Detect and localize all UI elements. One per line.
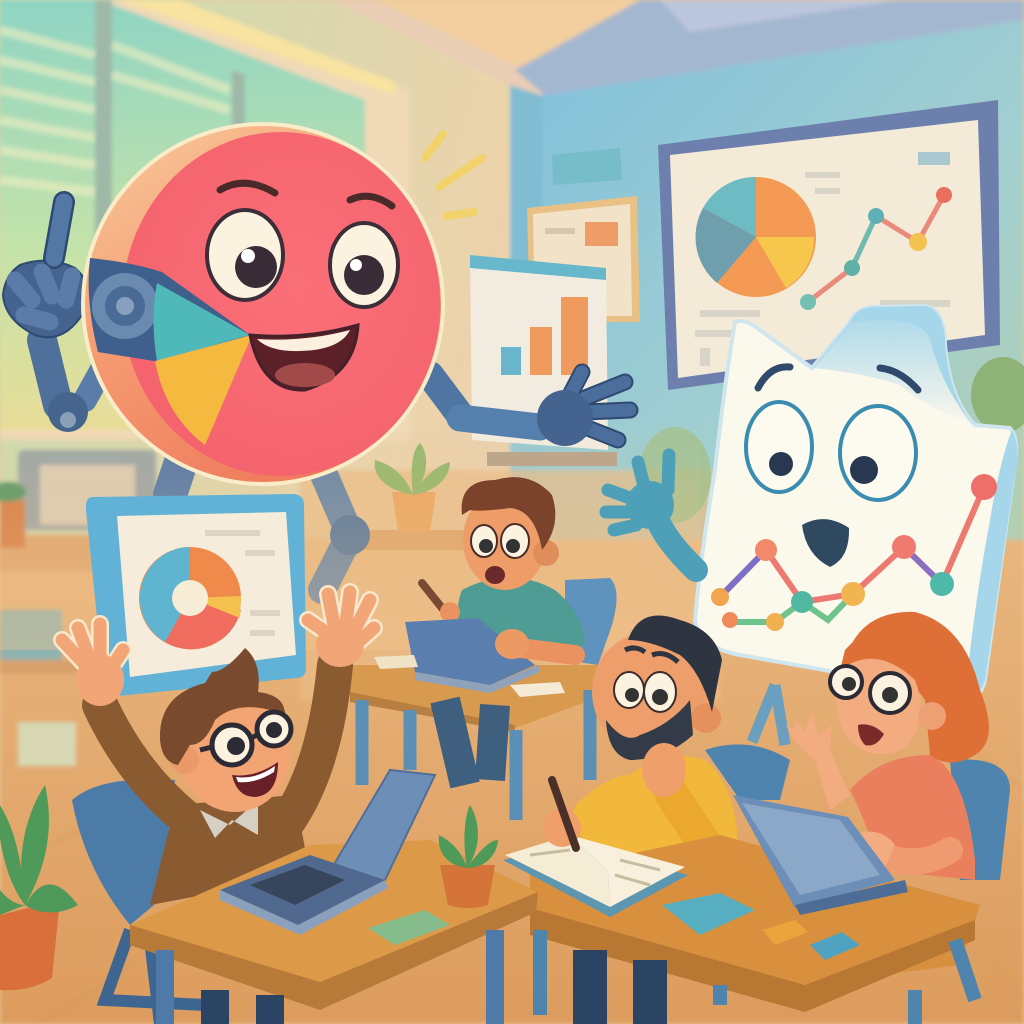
laptop left [220,770,435,935]
potted plant on desk [439,805,498,908]
right hand [308,592,374,667]
pencil [422,583,450,618]
raised hand [786,712,850,810]
head [830,630,946,754]
writing arm, hand and pencil [543,780,625,848]
potted plant behind student [375,443,450,532]
mouth [250,325,358,390]
eyebrows [758,367,790,388]
background desk [355,530,505,550]
torso [458,578,585,660]
plant on right wall [971,357,1024,433]
sticky notes on right desk [662,893,860,960]
monitor with donut chart [86,494,306,696]
collar [200,800,258,838]
student in teal shirt with laptop [350,477,617,820]
standing bar chart board [470,255,617,466]
left shelf desk and stacked books [0,450,156,766]
chair [72,779,205,1024]
student with raised arms and glasses [62,592,374,1024]
pie body [83,124,443,484]
large wall whiteboard with pie and line chart [658,100,1000,390]
chair [705,744,790,800]
left hand [62,624,124,706]
student with beard in yellow shirt [570,616,790,870]
character hand [606,455,696,570]
plant behind chart hand [639,427,711,523]
robot legs [170,450,370,590]
whiteboard line chart [800,187,952,310]
hand on chin [642,743,686,797]
arm [520,648,575,655]
warm haze over middle [0,420,700,650]
window with blinds [0,0,410,440]
open notebook [503,835,688,917]
easel legs [752,685,785,745]
forearm in sleeve [672,795,712,855]
torso [850,755,975,880]
head [160,648,291,812]
left eyebrow [220,183,275,193]
front left desk [130,840,538,1024]
left eye [207,210,283,300]
monitor donut chart [139,547,241,649]
line chart character [606,306,1018,745]
legs [445,700,495,785]
chair [565,578,617,665]
pie cut-out with mechanical joint [89,258,252,445]
mouth [802,519,849,567]
right eye [330,223,398,307]
robot left arm [42,340,118,432]
wall note: blue sticky [552,148,622,185]
eyes [746,402,812,492]
head [462,477,559,590]
torso and arms [100,665,335,905]
front right desk [530,835,980,1024]
head [592,616,722,760]
potted plant bottom-left [0,785,78,990]
hair [845,612,989,762]
pie chart robot character [83,124,482,484]
papers [374,655,418,669]
chair [950,759,1010,880]
torso [570,756,738,870]
robot right arm and hand [430,372,630,446]
wall poster: small orange chart [527,196,640,322]
laptop [405,618,540,693]
laptop right [733,795,908,915]
lower hand and arm [880,850,950,861]
desk [350,665,610,820]
chart body [695,306,1016,697]
right eyebrow [350,196,392,206]
excitement marks [425,134,482,216]
student with red hair and glasses [786,612,1010,880]
sticky note left desk [368,910,450,945]
character chart lines [720,487,984,622]
robot raised hand [3,202,88,337]
whiteboard pie chart [696,177,816,297]
